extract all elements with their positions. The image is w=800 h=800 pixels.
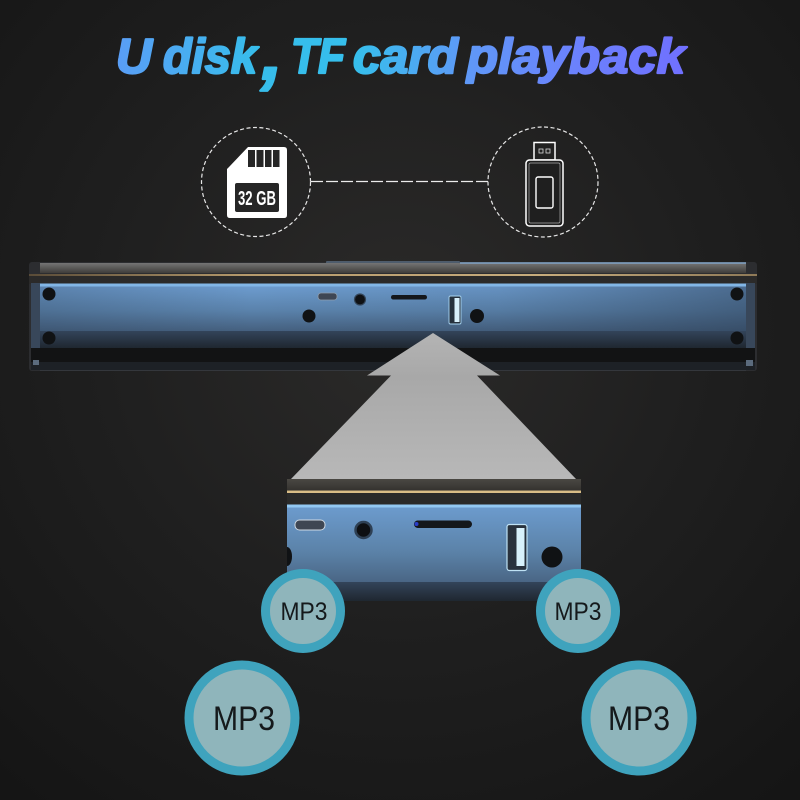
lower dark band [287, 582, 581, 601]
micro USB port [295, 520, 325, 530]
screws [287, 547, 292, 566]
dark band [29, 276, 757, 284]
title: U [116, 30, 154, 84]
panel side shading [40, 286, 746, 331]
icon: 32 GB memory card [202, 128, 310, 236]
SD card slot [391, 295, 427, 300]
audio jack [354, 294, 366, 305]
dashed connector line [311, 180, 489, 182]
MP3 badge: small left [266, 574, 340, 648]
title [116, 11, 688, 96]
gold trim line [287, 490, 581, 493]
micro USB port [318, 293, 337, 300]
title: playback [465, 30, 688, 84]
MP3 badge: large right: MP3 [608, 700, 670, 738]
connection diagram: memory card to USB drive [202, 127, 598, 237]
MP3 badge: small right: MP3 [554, 598, 602, 626]
USB port [449, 296, 461, 324]
title: card [353, 30, 459, 84]
top right highlight [460, 262, 746, 264]
top buttons [326, 261, 460, 265]
blue panel [40, 286, 746, 331]
title: TF [291, 30, 346, 84]
zoom arrow [291, 333, 576, 479]
end caps [29, 262, 757, 371]
blue side caps [31, 283, 40, 348]
blue panel [287, 507, 581, 582]
title: disk [163, 30, 260, 84]
top surface [40, 263, 746, 273]
MP3 badge: small left: MP3 [280, 598, 328, 626]
light blue highlight [40, 284, 746, 286]
magnified port panel [287, 479, 581, 601]
MP3 badge: large right [586, 665, 692, 771]
MP3 badge: large left [189, 665, 295, 771]
SD card slot [414, 520, 472, 528]
gold trim line [29, 274, 757, 276]
USB port [507, 524, 527, 570]
MP3 badge: large left: MP3 [213, 700, 275, 738]
soundbar rear view [29, 261, 757, 371]
icon: 32 GB memory card: 32 GB [238, 188, 276, 210]
audio jack [356, 522, 372, 538]
feet [33, 360, 39, 365]
MP3 badge: small right [540, 574, 616, 648]
base [31, 348, 755, 362]
lower dark blue band [40, 331, 746, 348]
screws [42, 288, 744, 344]
light blue highlight [287, 504, 581, 508]
icon: USB flash drive [488, 127, 598, 237]
title: , [260, 11, 283, 96]
top surface [287, 479, 581, 490]
dark band [287, 493, 581, 505]
